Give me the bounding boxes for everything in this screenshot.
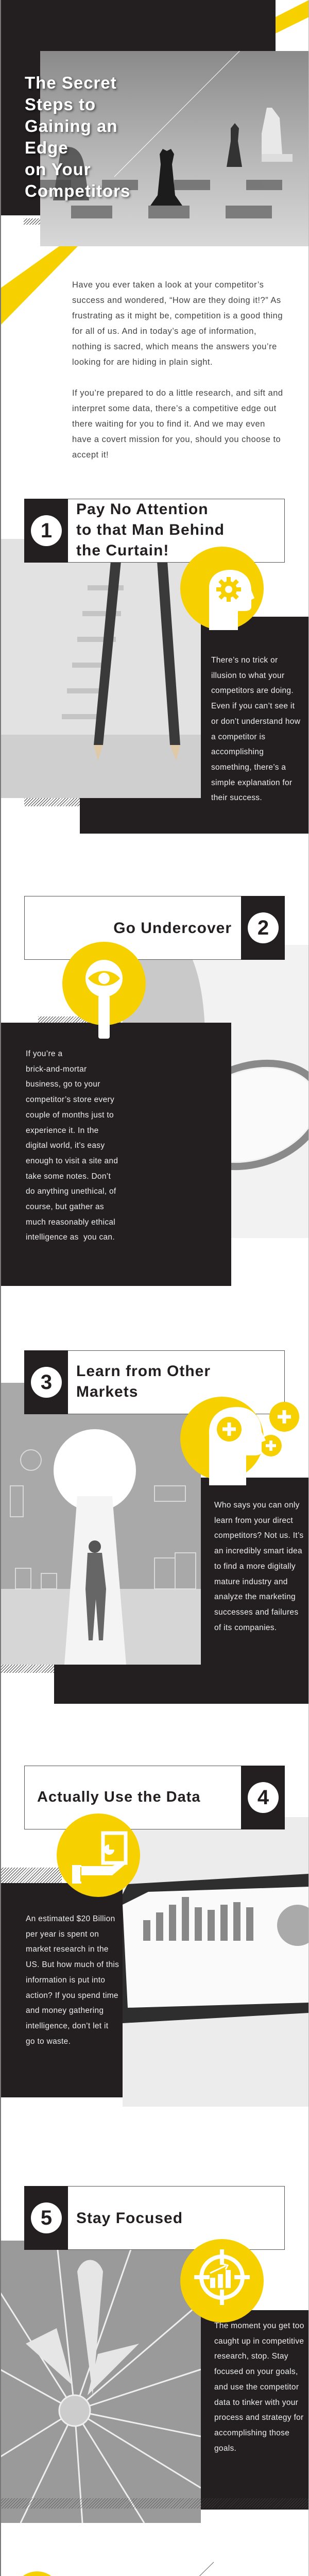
black text panel <box>0 1023 231 1286</box>
text 3: Who says you can only learn from your direct competitors? Not us. It’s an incredibly smart idea to find a more digitally mature industry and analyze the marketing successes and failures of its companies. <box>214 1501 303 1632</box>
intro text: If you’re prepared to do a little research, and sift and interpret some data, there’s a competitive edge out there waiting for you to find it. And we may even have a covert mission for you, should you choose to accept it! <box>72 388 283 460</box>
header 4: 4 <box>258 1786 269 1809</box>
text 1: There’s no trick or illusion to what your competitors are doing. Even if you can’t see it or don’t understand how a competitor is accomplishing something, there’s a simple explanation for their success. <box>211 656 300 802</box>
icon: building <box>23 2571 52 2576</box>
header 1: Pay No Attention <box>76 501 209 518</box>
hatch under title <box>24 218 40 225</box>
about WSI <box>23 2562 214 2576</box>
black text panel <box>0 1883 123 2097</box>
title: Gaining an <box>25 116 118 135</box>
header 4: Actually Use the Data <box>37 1789 201 1805</box>
title <box>25 73 132 203</box>
text 4: An estimated $20 Billion per year is spent on market research in the US. But how much of this information is put into action? If you spend time and money gathering intelligence, don’t let it go to waste. <box>26 1914 119 2046</box>
title: Steps to <box>25 95 96 114</box>
intro text: Have you ever taken a look at your competitor’s success and wondered, “How are they doing it!?” As frustrating as it might be, competition is a good thing for all of us. And in today’s age of information, nothing is sacred, which means the answers you’re looking for are hiding in plain sight. <box>72 280 283 367</box>
section 5 <box>1 2186 308 2523</box>
dark header band <box>0 0 276 215</box>
header 5: 5 <box>41 2207 52 2229</box>
section 2 <box>1 896 308 1286</box>
title: Competitors <box>25 181 130 200</box>
hatch <box>24 798 80 806</box>
header 5: Stay Focused <box>76 2210 183 2227</box>
photo: tablet charts <box>123 1817 308 2107</box>
text 2: If you’re a <box>26 1049 62 1058</box>
header 3: Markets <box>76 1383 138 1400</box>
section 1 <box>1 499 308 834</box>
intro text <box>72 280 283 460</box>
hatch <box>0 1665 54 1673</box>
header 4 <box>24 1766 285 1829</box>
photo: keyhole <box>1 1383 201 1665</box>
photo: dartboard <box>1 2241 201 2523</box>
title: on Your <box>25 160 91 179</box>
icon: target chart <box>180 2239 264 2323</box>
photo: pencils ladder <box>1 539 201 798</box>
yellow diagonal band <box>1 246 78 325</box>
yellow corner stripe <box>276 0 308 33</box>
title: The Secret <box>25 73 117 92</box>
chess photo <box>40 51 308 246</box>
black text panel <box>201 2310 309 2510</box>
header 3 <box>24 1350 285 1414</box>
title: Edge <box>25 138 68 157</box>
icon: document hand <box>57 1814 140 1897</box>
header 2: Go Undercover <box>113 920 232 937</box>
header 2 <box>24 896 285 960</box>
header 3: 3 <box>41 1371 52 1394</box>
header 1: to that Man Behind <box>76 521 225 538</box>
thin diagonal line <box>199 2562 214 2576</box>
header 1: 1 <box>41 519 52 542</box>
text 2: brick‑and‑mortar business, go to your competitor’s store every couple of months just to experience it. In the digital world, it’s easy enough to visit a site and take some notes. Don’t do anything unethical, of course, but gather as much reasonably ethical intelligence as you can. <box>26 1065 118 1242</box>
icon: eye magnifier <box>62 942 146 1039</box>
icon: head with plus <box>180 1397 299 1485</box>
black text panel <box>80 617 309 834</box>
header 1 <box>24 499 285 563</box>
hatch <box>38 1016 121 1023</box>
header 2: 2 <box>258 917 269 939</box>
photo: magnifier <box>123 945 308 1238</box>
hatch <box>0 2498 309 2509</box>
black text panel <box>54 1478 309 1704</box>
header 3: Learn from Other <box>76 1363 211 1380</box>
icon: head with gear <box>180 547 264 630</box>
section 3 <box>1 1350 308 1704</box>
hero header <box>1 0 308 246</box>
section 4 <box>1 1766 308 2107</box>
header 1: the Curtain! <box>76 542 169 559</box>
header 5 <box>24 2186 285 2250</box>
text 5: The moment you get too caught up in competitive research, stop. Stay focused on your goals, and use the competitor data to tinker with your process and strategy for accomplishing those goals. <box>214 2321 304 2453</box>
hatch <box>0 1868 62 1883</box>
